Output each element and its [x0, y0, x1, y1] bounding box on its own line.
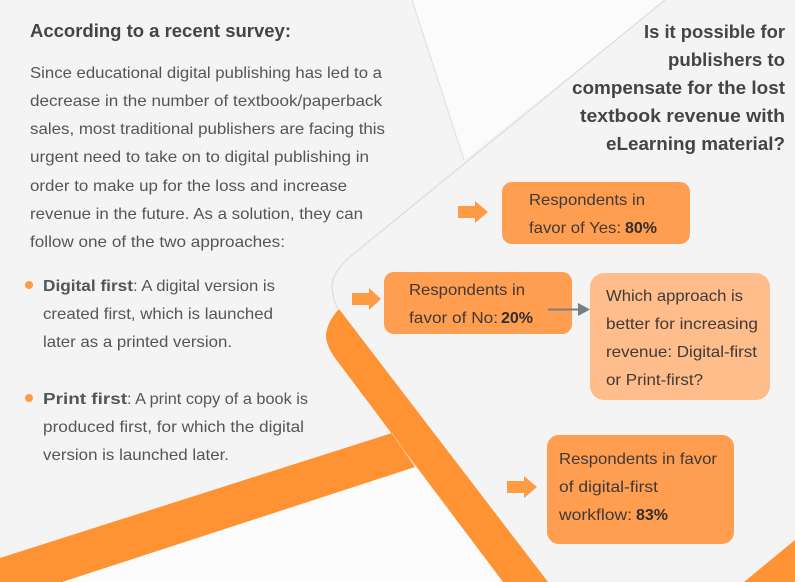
- bullet: print first: produced first, for which the digital: [43, 419, 304, 436]
- intro paragraph: decrease in the number of textbook/paperback: [30, 93, 383, 110]
- box: respondents in favor of no: [384, 272, 572, 334]
- box: respondents in favor of yes: favor of Yes:: [529, 220, 621, 237]
- box: digital-first workflow: workflow:: [558, 507, 632, 524]
- box: which approach question: Which approach is: [606, 288, 743, 305]
- bullet: print first: Print first: [43, 391, 128, 408]
- bullet: digital first: created first, which is launched: [43, 306, 273, 323]
- bullet: print first: : A print copy of a book is: [127, 391, 308, 408]
- icon: arrow to yes box: [458, 201, 488, 223]
- intro paragraph: sales, most traditional publishers are facing this: [30, 121, 385, 138]
- panel: survey text: [25, 21, 385, 464]
- intro paragraph: [30, 65, 385, 251]
- box: digital-first workflow: Respondents in favor: [559, 451, 718, 468]
- arrow: no box to question: [548, 303, 590, 316]
- intro paragraph: order to make up for the loss and increase: [30, 178, 347, 195]
- heading: question: textbook revenue with: [580, 106, 785, 126]
- intro paragraph: Since educational digital publishing has led to a: [30, 65, 382, 82]
- icon: arrow to digital-first box: [507, 476, 537, 498]
- box: respondents in favor of yes: [502, 182, 690, 244]
- bullet: digital first: Digital first: [43, 278, 134, 295]
- bullet: print first: [25, 391, 308, 464]
- box: digital-first workflow: of digital-first: [559, 479, 659, 496]
- heading: question: publishers to: [668, 50, 785, 70]
- heading: question: Is it possible for: [644, 22, 785, 42]
- box: which approach question: revenue: Digital-first: [606, 344, 758, 361]
- intro paragraph: follow one of the two approaches:: [30, 234, 285, 251]
- intro paragraph: revenue in the future. As a solution, they can: [30, 206, 363, 223]
- orange corner: bottom right: [744, 540, 795, 582]
- box: which approach question: or Print-first?: [606, 372, 703, 389]
- box: respondents in favor of yes: 80%: [625, 220, 657, 237]
- box: digital-first workflow: 83%: [636, 507, 668, 524]
- heading: question: compensate for the lost: [572, 78, 785, 98]
- box: digital-first workflow: [547, 435, 734, 544]
- box: which approach question: better for increasing: [606, 316, 758, 333]
- heading: according to a recent survey: According to a recent survey:: [30, 21, 291, 41]
- heading: question: [572, 22, 785, 154]
- bullet: digital first: [25, 278, 275, 351]
- box: which approach question: [590, 273, 770, 400]
- intro paragraph: urgent need to take on to digital publishing in: [30, 149, 369, 166]
- orange band: diagonal: [326, 309, 548, 582]
- box: respondents in favor of no: 20%: [501, 310, 533, 327]
- bullet: digital first: : A digital version is: [133, 278, 275, 295]
- bullet: digital first: later as a printed version.: [43, 334, 232, 351]
- box: respondents in favor of no: favor of No:: [409, 310, 498, 327]
- box: respondents in favor of no: Respondents in: [409, 282, 525, 299]
- icon: arrow to no box: [352, 288, 381, 310]
- box: respondents in favor of yes: Respondents in: [529, 192, 645, 209]
- heading: question: eLearning material?: [606, 134, 785, 154]
- orange band: lower left: [0, 433, 415, 582]
- bullet: print first: version is launched later.: [43, 447, 229, 464]
